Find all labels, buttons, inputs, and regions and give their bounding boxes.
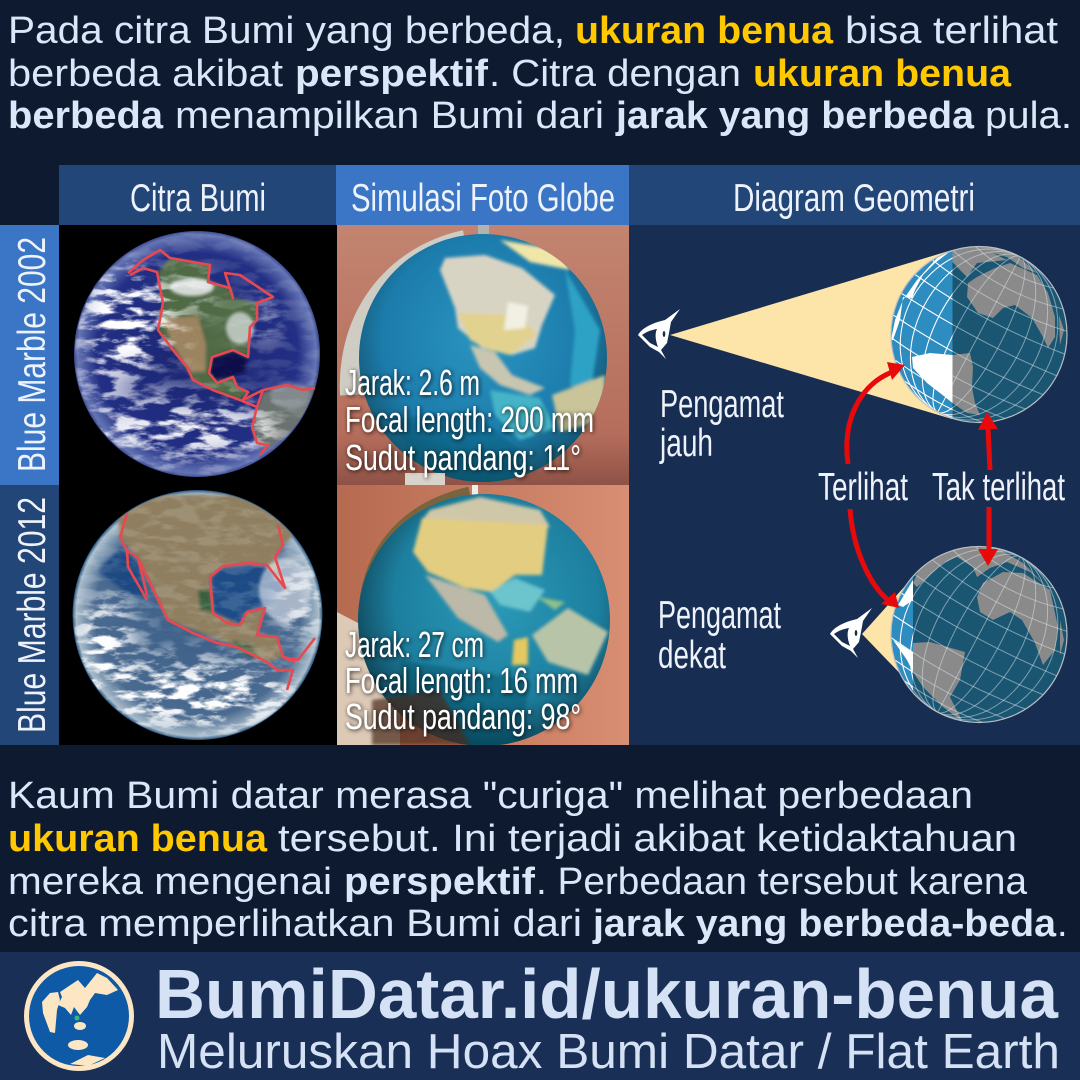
photo caption: far xyxy=(345,362,594,478)
header: Citra Bumi: Citra Bumi xyxy=(130,177,266,220)
photo caption: near: Focal length: 16 mm xyxy=(345,660,578,701)
view cone: near observer xyxy=(862,577,913,687)
intro text block: berbeda xyxy=(8,95,164,137)
arrow: Terlihat to near globe xyxy=(850,509,899,608)
explanation text block: perspektif xyxy=(344,861,535,903)
photo caption: far: Focal length: 200 mm xyxy=(345,399,594,440)
label: Pengamat jauh: jauh xyxy=(659,422,713,465)
explanation text block: . xyxy=(1057,903,1068,945)
panel: globe photo simulations xyxy=(337,225,629,746)
footer band xyxy=(0,952,1080,1080)
explanation text block: mereka mengenai xyxy=(8,861,332,903)
site URL: BumiDatar.id/ukuran-benua xyxy=(155,955,1059,1033)
globe photo: near xyxy=(337,485,629,746)
photo caption: near: Sudut pandang: 98° xyxy=(345,696,581,737)
row label: Blue Marble 2012 xyxy=(0,485,59,745)
intro text block xyxy=(8,10,1072,137)
photo caption: near: Jarak: 27 cm xyxy=(345,624,484,665)
intro text block: ukuran benua xyxy=(753,53,1012,95)
continent outline: 2002 xyxy=(128,250,315,455)
earth photo: Blue Marble 2002 xyxy=(74,231,320,477)
row label: Blue Marble 2002: Blue Marble 2002 xyxy=(11,237,54,472)
earth photo: Blue Marble 2012 xyxy=(72,490,322,740)
globe diagram: far xyxy=(890,246,1068,424)
explanation text block: Kaum Bumi datar merasa "curiga" melihat perbedaan xyxy=(8,775,973,817)
intro text block: Pada citra Bumi yang berbeda, xyxy=(8,10,565,52)
header: Citra Bumi xyxy=(59,165,336,225)
land: hidden hemisphere xyxy=(952,246,1064,415)
arrow: Tak terlihat to near globe xyxy=(978,507,998,566)
label: Pengamat jauh: Pengamat xyxy=(660,383,784,426)
panel: earth images xyxy=(59,225,337,745)
icon: eye, far observer xyxy=(638,309,680,359)
explanation text block: . Perbedaan tersebut karena xyxy=(536,861,1028,903)
logo: globe xyxy=(24,961,134,1071)
globe diagram: near xyxy=(890,546,1068,724)
header: Diagram Geometri: Diagram Geometri xyxy=(733,177,975,220)
panel: geometry diagram xyxy=(629,215,1080,754)
row label: Blue Marble 2002 xyxy=(0,225,59,485)
icon: eye, near observer xyxy=(830,608,872,658)
header: Simulasi Foto Globe xyxy=(336,165,629,225)
intro text block: berbeda akibat xyxy=(8,53,283,95)
intro text block: pula. xyxy=(985,95,1072,137)
intro text block: bisa terlihat xyxy=(845,10,1058,52)
header: Diagram Geometri xyxy=(629,165,1080,225)
continent outline: 2012 xyxy=(120,513,315,690)
land: visible hemisphere xyxy=(893,580,913,672)
label: Terlihat: Terlihat xyxy=(818,466,908,509)
intro text block: ukuran benua xyxy=(575,10,834,52)
label: Pengamat jauh xyxy=(659,383,784,465)
photo caption: near xyxy=(345,624,581,737)
land: visible hemisphere xyxy=(891,250,952,403)
explanation text block xyxy=(8,775,1068,945)
globe photo: far xyxy=(337,225,629,485)
intro text block: perspektif xyxy=(295,53,488,95)
land: hidden hemisphere xyxy=(913,547,1064,722)
label: Pengamat dekat xyxy=(658,594,781,677)
photo caption: far: Jarak: 2.6 m xyxy=(345,362,480,403)
tagline: Meluruskan Hoax Bumi Datar / Flat Earth xyxy=(157,1025,1060,1079)
explanation text block: citra memperlihatkan Bumi dari xyxy=(8,903,582,945)
intro text block: . Citra dengan xyxy=(489,53,741,95)
header: Simulasi Foto Globe: Simulasi Foto Globe xyxy=(351,177,615,220)
row label: Blue Marble 2012: Blue Marble 2012 xyxy=(11,497,54,733)
label: Pengamat dekat: dekat xyxy=(658,634,726,677)
photo caption: far: Sudut pandang: 11° xyxy=(345,437,581,478)
arrow: Terlihat to far globe xyxy=(847,362,905,464)
table header row xyxy=(59,165,1080,225)
explanation text block: tersebut. Ini terjadi akibat ketidaktahuan xyxy=(278,818,1017,860)
intro text block: menampilkan Bumi dari xyxy=(175,95,604,137)
explanation text block: ukuran benua xyxy=(8,818,268,860)
view cone: far observer xyxy=(670,250,952,419)
explanation text block: jarak yang berbeda-beda xyxy=(592,903,1057,945)
label: Pengamat dekat: Pengamat xyxy=(658,594,781,637)
arrow: Tak terlihat to far globe xyxy=(978,412,998,470)
intro text block: jarak yang berbeda xyxy=(615,95,975,137)
